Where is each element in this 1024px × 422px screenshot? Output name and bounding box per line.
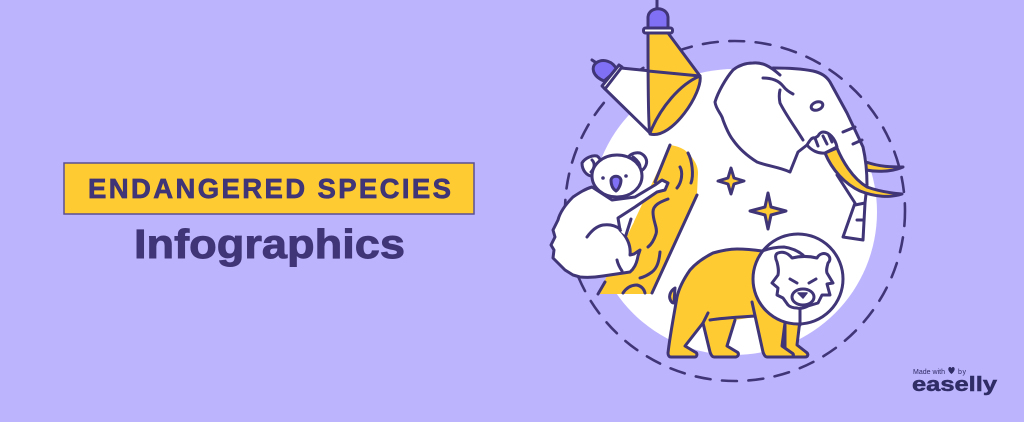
- icon: large sparkle: [750, 193, 786, 229]
- subtitle: Infographics: [134, 221, 405, 267]
- icon: small sparkle: [718, 168, 744, 194]
- white backdrop circle: [591, 69, 877, 355]
- icon: elephant: [715, 63, 903, 240]
- logo: made with love by easelly: by: [958, 369, 966, 376]
- title banner: [64, 163, 474, 214]
- icon: koala: [551, 153, 668, 277]
- logo: made with love by easelly: [912, 367, 998, 396]
- icon: two spotlights: [592, 0, 700, 135]
- dashed orbit circle: [565, 41, 905, 381]
- icon: tree trunk: [598, 145, 698, 294]
- logo: made with love by easelly: easelly: [912, 374, 998, 396]
- title banner: ENDANGERED SPECIES: [88, 173, 451, 204]
- icon: bear: [668, 234, 843, 357]
- logo: made with love by easelly: Made with: [913, 369, 945, 376]
